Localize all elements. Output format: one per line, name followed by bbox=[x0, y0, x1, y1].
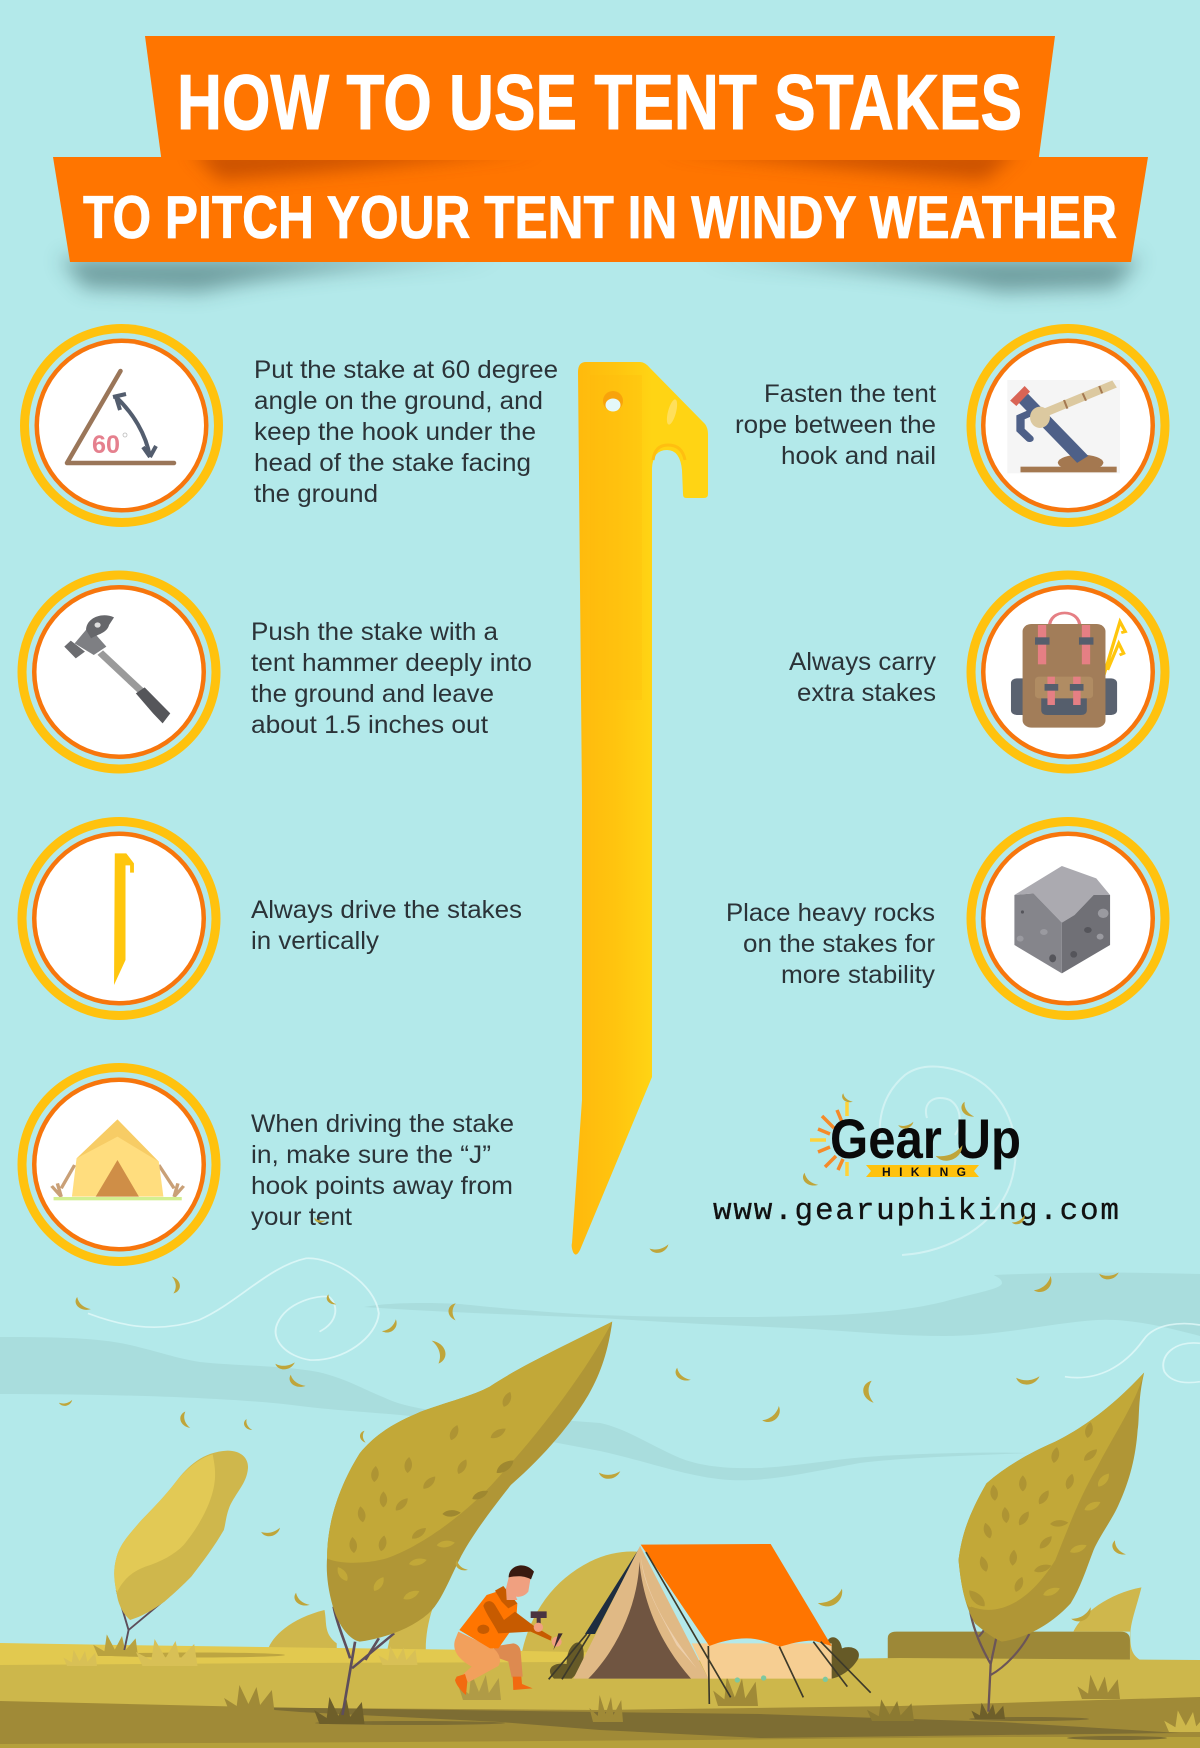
logo wordmark: Gear Up bbox=[830, 1107, 1021, 1170]
stake highlight bbox=[665, 398, 679, 426]
ring bbox=[966, 817, 1170, 1020]
text: step 5 bbox=[735, 380, 936, 470]
text: step 3: in vertically bbox=[251, 927, 380, 955]
step 7: rock bbox=[726, 817, 1170, 1020]
text: step 3 bbox=[251, 896, 522, 955]
text: step 2: tent hammer deeply into bbox=[251, 649, 532, 677]
small tree bbox=[114, 1451, 248, 1650]
ring bbox=[966, 570, 1170, 774]
text: step 7: on the stakes for bbox=[743, 930, 935, 958]
text: step 4: in, make sure the “J” bbox=[251, 1141, 491, 1169]
step 2: hammer bbox=[18, 570, 532, 774]
stake in hand bbox=[553, 1633, 563, 1650]
right swirl bbox=[1065, 1324, 1200, 1383]
upper banner ribbon bbox=[145, 36, 1055, 160]
text: step 5: rope between the bbox=[735, 411, 936, 439]
tent door flap bbox=[641, 1557, 697, 1668]
stake body bbox=[572, 362, 708, 1255]
website url: www.gearuphiking.com bbox=[713, 1194, 1119, 1229]
icon: 60 degree angle: 60 bbox=[92, 431, 120, 459]
hands bbox=[534, 1623, 562, 1647]
step 4: tent direction bbox=[18, 1063, 514, 1266]
hammer bbox=[531, 1611, 547, 1625]
tent front bbox=[573, 1546, 708, 1679]
face bbox=[506, 1575, 531, 1600]
big tree bbox=[327, 1322, 612, 1715]
text: step 2 bbox=[251, 618, 532, 739]
right tree bbox=[959, 1373, 1144, 1712]
tent side wall bbox=[692, 1643, 832, 1679]
text: step 2: Push the stake with a bbox=[251, 618, 498, 646]
left swirl bbox=[88, 1258, 379, 1360]
wind swirls bbox=[88, 1258, 1200, 1383]
text: step 6 bbox=[789, 648, 937, 707]
jacket bbox=[459, 1591, 517, 1648]
icon: rock bbox=[1014, 866, 1110, 973]
text: step 1: angle on the ground, and bbox=[254, 387, 543, 415]
logo tagline: HIKING bbox=[882, 1165, 966, 1179]
hook rim bbox=[653, 445, 685, 460]
text: step 6: extra stakes bbox=[797, 679, 936, 707]
icon: tent bbox=[52, 1119, 184, 1200]
lower banner ribbon bbox=[53, 157, 1148, 262]
shoes bbox=[455, 1674, 533, 1695]
text: step 1: the ground bbox=[254, 480, 378, 508]
step 6: backpack bbox=[789, 570, 1170, 774]
text: step 4 bbox=[251, 1110, 514, 1231]
text: step 7 bbox=[726, 899, 936, 989]
ring bbox=[20, 324, 223, 527]
text: step 2: about 1.5 inches out bbox=[251, 711, 488, 739]
text: step 5: hook and nail bbox=[781, 442, 936, 470]
title banner bbox=[53, 36, 1148, 292]
text: step 4: When driving the stake bbox=[251, 1110, 514, 1138]
stake hole rim bbox=[603, 391, 623, 411]
near leg bbox=[454, 1632, 500, 1682]
stake channel shading bbox=[590, 375, 642, 700]
tent roof bbox=[641, 1544, 832, 1647]
icon: hammer bbox=[64, 615, 170, 723]
step 3: vertical stake bbox=[18, 817, 522, 1020]
text: step 7: more stability bbox=[781, 961, 936, 989]
icon: rope on stake bbox=[1007, 380, 1120, 473]
guy lines bbox=[549, 1552, 871, 1704]
icon: small stake bbox=[114, 853, 134, 985]
stake hole bbox=[606, 398, 620, 412]
logo: Gear Up Hiking bbox=[713, 1102, 1119, 1229]
step 5: rope bbox=[735, 324, 1170, 527]
grass tufts bbox=[63, 1634, 1200, 1732]
pocket bbox=[477, 1625, 489, 1634]
text: step 4: your tent bbox=[251, 1203, 352, 1231]
text: step 1: head of the stake facing bbox=[254, 449, 531, 477]
tent door bbox=[588, 1562, 691, 1679]
ring bbox=[966, 324, 1170, 527]
logo sun rays bbox=[810, 1102, 847, 1176]
banner shadow bbox=[60, 258, 1140, 292]
bushes beside tent bbox=[550, 1637, 859, 1679]
tent bbox=[549, 1544, 871, 1704]
hair bbox=[509, 1565, 534, 1579]
text: step 4: hook points away from bbox=[251, 1172, 513, 1200]
text: step 6: Always carry bbox=[789, 648, 937, 676]
falling leaves bbox=[59, 1093, 1130, 1625]
far leg bbox=[493, 1643, 523, 1677]
text: step 1: keep the hook under the bbox=[254, 418, 536, 446]
collar bbox=[495, 1586, 517, 1608]
text: step 3: Always drive the stakes bbox=[251, 896, 522, 924]
wind clouds bbox=[0, 1273, 1200, 1480]
ring bbox=[18, 570, 220, 774]
arm bbox=[483, 1601, 552, 1641]
step 1: angle bbox=[20, 324, 558, 527]
text: step 7: Place heavy rocks bbox=[726, 899, 935, 927]
ring bbox=[18, 1063, 220, 1266]
text: step 1: Put the stake at 60 degree bbox=[254, 356, 558, 384]
text: step 2: the ground and leave bbox=[251, 680, 494, 708]
wind swirl behind logo bbox=[880, 1067, 1016, 1255]
landscape scene bbox=[0, 1322, 1200, 1748]
logo ribbon bbox=[866, 1165, 979, 1177]
background bushes bbox=[268, 1551, 1143, 1662]
text: step 5: Fasten the tent bbox=[764, 380, 936, 408]
ground layers bbox=[0, 1643, 1200, 1748]
small plants bbox=[735, 1675, 828, 1683]
tent back pane bbox=[585, 1546, 641, 1634]
icon: 60 degree angle bbox=[67, 371, 174, 463]
icon: backpack bbox=[1011, 613, 1125, 728]
centre tent stake bbox=[572, 362, 708, 1255]
person hammering stake bbox=[454, 1565, 563, 1695]
ring bbox=[18, 817, 220, 1020]
ribbon fold shading bbox=[192, 160, 1017, 188]
text: step 1 bbox=[254, 356, 558, 508]
